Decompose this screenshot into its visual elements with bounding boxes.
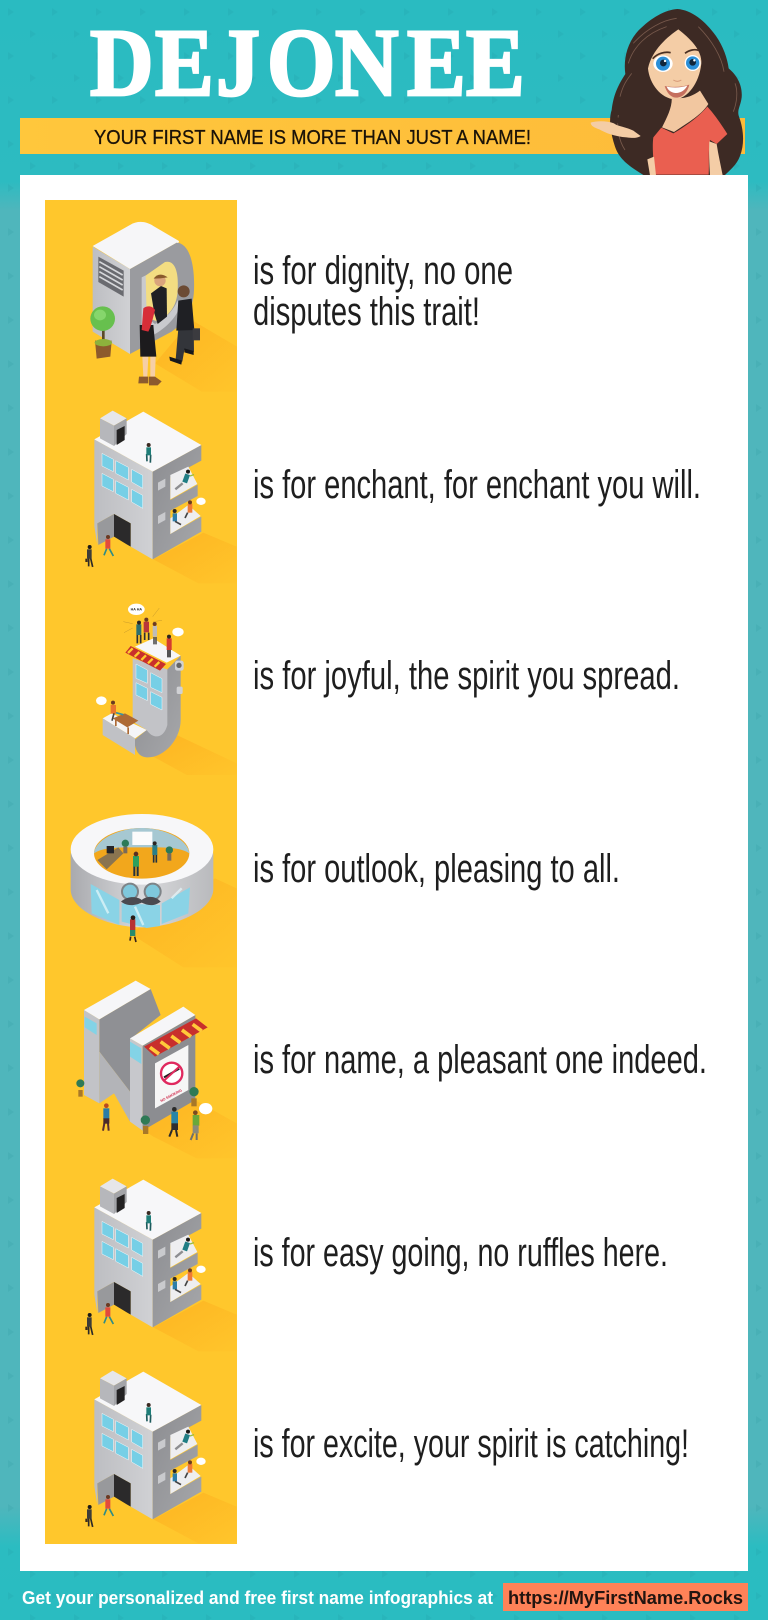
illustration: letter D building bbox=[90, 222, 237, 392]
illustration: third letter E building bbox=[85, 1371, 237, 1543]
illustration: letter J building: HA HA bbox=[131, 608, 142, 612]
icon: cartoon woman bbox=[591, 9, 743, 176]
illustration: second letter E building bbox=[85, 1179, 237, 1351]
illustration: letter N building bbox=[76, 981, 237, 1158]
illustration: letter O building bbox=[71, 814, 237, 967]
text: letter O line: is for outlook, pleasing to all. bbox=[253, 847, 620, 891]
illustration: letter E building bbox=[85, 411, 237, 583]
subtitle: YOUR FIRST NAME IS MORE THAN JUST A NAME! bbox=[94, 126, 531, 149]
footer link bbox=[503, 1583, 748, 1611]
text: letter D line bbox=[253, 249, 513, 334]
panel: yellow illustration column bbox=[45, 200, 237, 1544]
text: letter D line: disputes this trait! bbox=[253, 290, 480, 334]
illustration: letter N building: NO SMOKING bbox=[160, 1088, 183, 1103]
footer text: Get your personalized and free first name infographics at bbox=[22, 1588, 493, 1608]
footer link: https://MyFirstName.Rocks bbox=[508, 1588, 743, 1608]
illustration: letter J building bbox=[96, 604, 237, 775]
banner bbox=[20, 118, 745, 154]
title: DEJONEE bbox=[90, 10, 525, 116]
text: letter D line: is for dignity, no one bbox=[253, 249, 513, 293]
